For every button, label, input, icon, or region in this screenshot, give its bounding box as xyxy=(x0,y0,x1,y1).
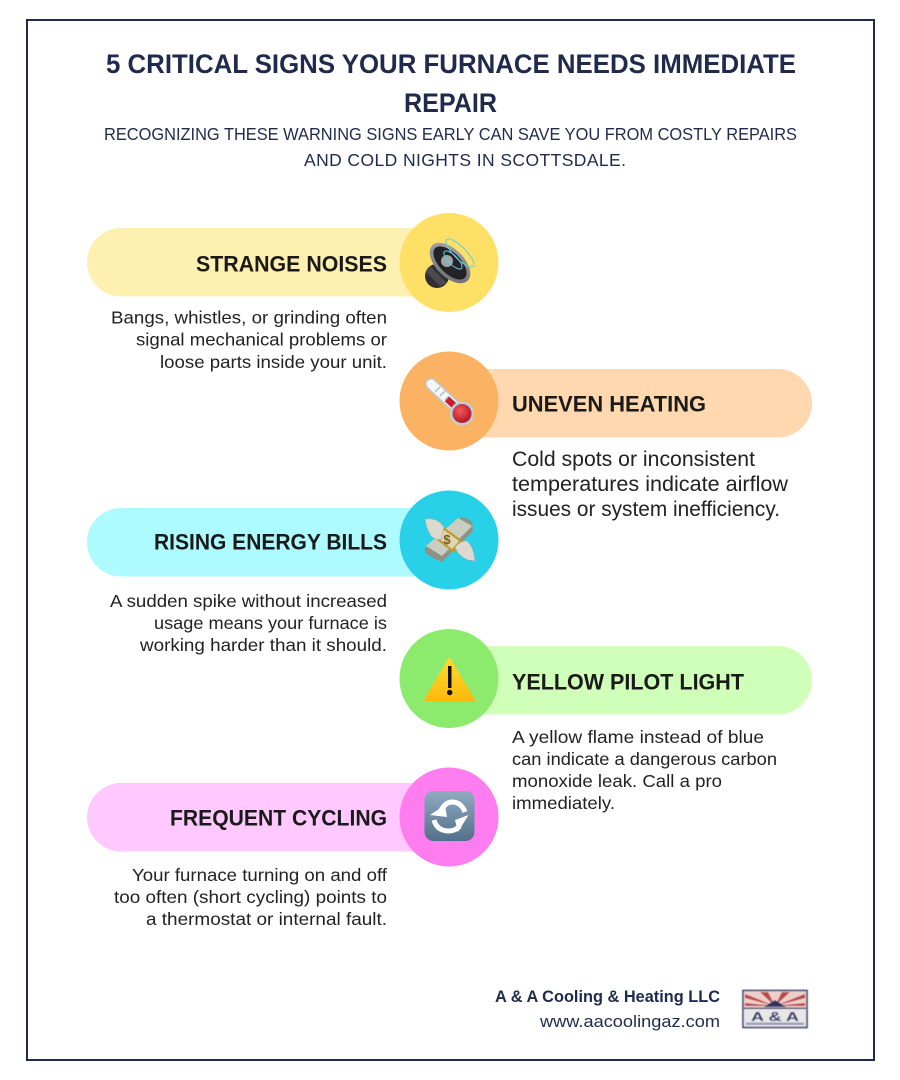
logo: A & A xyxy=(751,1009,800,1024)
panel: strange noises xyxy=(87,213,498,372)
description: strange noises: Bangs, whistles, or grinding often xyxy=(111,308,387,328)
description: yellow pilot light: monoxide leak. Call a pro xyxy=(512,771,722,791)
website: www.aacoolingaz.com xyxy=(539,1012,720,1031)
description: yellow pilot light: immediately. xyxy=(512,793,615,813)
circle: rising energy bills xyxy=(400,490,498,590)
subtitle xyxy=(104,124,797,170)
description: yellow pilot light: A yellow flame instead of blue xyxy=(512,727,764,747)
description: frequent cycling: Your furnace turning on and off xyxy=(132,865,387,885)
heading: yellow pilot light: YELLOW PILOT LIGHT xyxy=(512,670,744,694)
title: REPAIR xyxy=(404,88,497,118)
description: strange noises xyxy=(111,308,387,372)
description: frequent cycling: too often (short cycling) points to xyxy=(114,887,387,907)
description: uneven heating: Cold spots or inconsistent xyxy=(512,448,755,471)
description: uneven heating xyxy=(512,448,789,521)
description: rising energy bills: working harder than it should. xyxy=(139,635,387,655)
heading: rising energy bills: RISING ENERGY BILLS xyxy=(154,530,387,554)
pill: frequent cycling xyxy=(87,783,449,852)
company name: A & A Cooling & Heating LLC xyxy=(495,988,720,1006)
description: frequent cycling xyxy=(114,865,387,929)
panel: frequent cycling xyxy=(87,768,498,929)
icon: cycle arrows xyxy=(424,791,474,841)
circle: strange noises xyxy=(400,213,498,312)
description: yellow pilot light xyxy=(512,727,777,813)
icon: flying money: $ xyxy=(443,532,451,547)
heading: uneven heating: UNEVEN HEATING xyxy=(512,392,706,416)
panel: uneven heating xyxy=(400,352,812,521)
description: uneven heating: temperatures indicate airflow xyxy=(512,473,789,496)
description: frequent cycling: a thermostat or internal fault. xyxy=(146,909,387,929)
circle: yellow pilot light xyxy=(400,629,498,728)
logo xyxy=(743,990,807,1028)
title xyxy=(106,49,796,118)
icon: flying money xyxy=(425,518,475,562)
description: uneven heating: issues or system inefficiency. xyxy=(512,498,780,521)
heading: strange noises: STRANGE NOISES xyxy=(196,252,387,276)
icon: speaker xyxy=(422,235,478,291)
description: rising energy bills: A sudden spike without increased xyxy=(110,591,387,611)
pill: uneven heating xyxy=(449,369,812,438)
description: yellow pilot light: can indicate a dangerous carbon xyxy=(512,749,777,769)
title: 5 CRITICAL SIGNS YOUR FURNACE NEEDS IMMEDIATE xyxy=(106,49,796,79)
heading: frequent cycling: FREQUENT CYCLING xyxy=(170,806,387,830)
description: strange noises: signal mechanical problems or xyxy=(136,330,387,350)
description: rising energy bills xyxy=(110,591,387,655)
icon: warning sign xyxy=(424,658,474,700)
subtitle: AND COLD NIGHTS IN SCOTTSDALE. xyxy=(304,150,626,170)
circle: uneven heating xyxy=(400,352,498,450)
subtitle: RECOGNIZING THESE WARNING SIGNS EARLY CAN SAVE YOU FROM COSTLY REPAIRS xyxy=(104,124,797,144)
pill: strange noises xyxy=(87,228,449,296)
description: rising energy bills: usage means your furnace is xyxy=(154,613,387,633)
pill: rising energy bills xyxy=(87,508,449,576)
panel: rising energy bills xyxy=(87,490,498,655)
pill: yellow pilot light xyxy=(449,646,812,714)
description: strange noises: loose parts inside your unit. xyxy=(160,352,387,372)
panel: yellow pilot light xyxy=(400,629,812,813)
icon: thermometer xyxy=(431,384,474,426)
circle: frequent cycling xyxy=(400,768,498,866)
